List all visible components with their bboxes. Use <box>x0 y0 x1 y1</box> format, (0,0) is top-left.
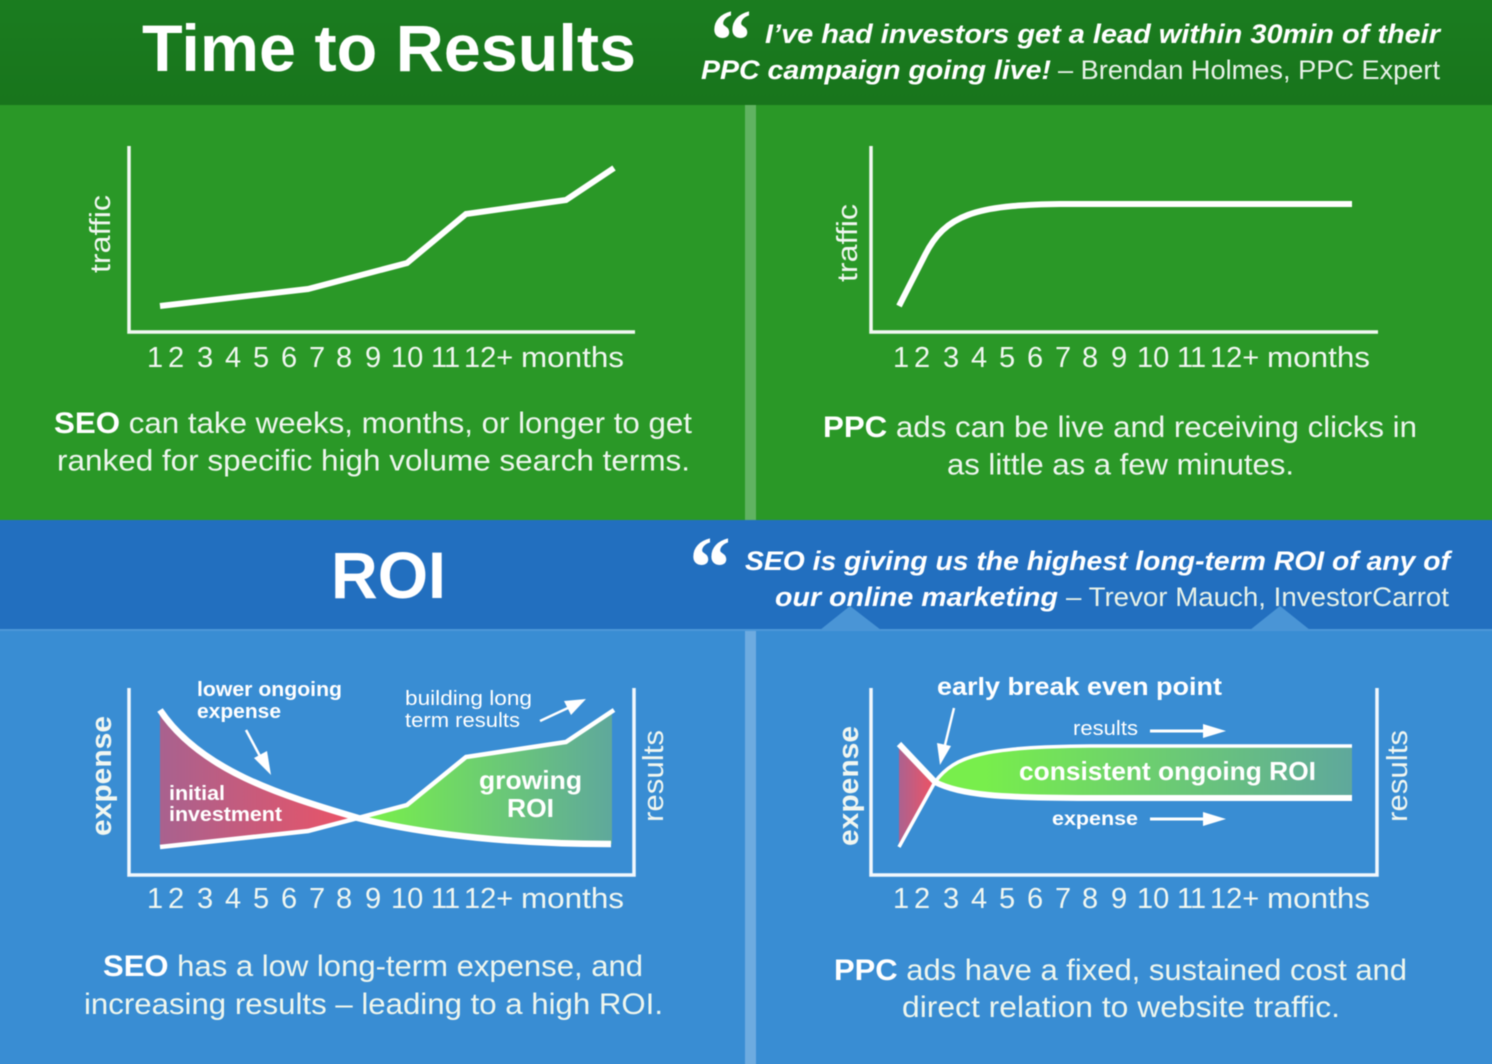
chart: SEO traffic over time: 12+ <box>464 342 513 374</box>
chart: PPC roi: 9 <box>1111 883 1127 915</box>
quote: Trevor Mauch: – Trevor Mauch, InvestorCarrot <box>1066 582 1450 612</box>
panel: roi background <box>0 630 1492 1064</box>
chart: PPC traffic over time: traffic <box>832 204 864 282</box>
chart: PPC roi <box>833 673 1414 915</box>
chart: PPC roi: 3 <box>943 883 959 915</box>
chart: PPC traffic over time: months <box>1267 342 1370 374</box>
line: expense <box>899 744 1352 798</box>
chart: SEO traffic over time: 1 <box>147 342 163 374</box>
label: early break even point: early break even point <box>937 673 1223 701</box>
text: PPC roi: direct relation to website traffic. <box>902 991 1340 1024</box>
chart: SEO roi: expense <box>86 716 118 836</box>
quote: Brendan Holmes: – Brendan Holmes, PPC Expert <box>1058 55 1440 85</box>
chart: SEO roi: 4 <box>225 883 241 915</box>
arrow: to expense line <box>246 730 271 775</box>
chart: SEO traffic over time: months <box>521 342 624 374</box>
chart: SEO roi: 2 <box>168 883 184 915</box>
chart: SEO traffic over time: 3 <box>197 342 213 374</box>
quote: Brendan Holmes: I’ve had investors get a lead within 30min of their <box>765 19 1442 49</box>
chart: SEO traffic over time: 5 <box>253 342 269 374</box>
chart: SEO traffic over time: 7 <box>309 342 325 374</box>
label: lower ongoing expense: lower ongoing <box>197 679 342 701</box>
line: results <box>160 710 614 847</box>
chart: SEO traffic over time: 8 <box>336 342 352 374</box>
quote: Trevor Mauch: “ <box>685 520 729 617</box>
chart: PPC traffic over time: 1 <box>893 342 909 374</box>
chart: PPC traffic over time: 2 <box>914 342 930 374</box>
text: SEO time to results: SEO can take weeks, months, or longer to get <box>54 407 693 440</box>
line: expense <box>160 710 611 844</box>
label: growing roi <box>479 765 582 823</box>
chart: PPC traffic over time: 7 <box>1055 342 1071 374</box>
chart: PPC traffic over time: 3 <box>943 342 959 374</box>
chart: PPC traffic over time <box>832 146 1378 374</box>
chart: SEO traffic over time: 6 <box>281 342 297 374</box>
chart: PPC roi: 4 <box>971 883 987 915</box>
arrow: upward results <box>540 699 586 721</box>
text: SEO roi: increasing results – leading to a high ROI. <box>84 988 663 1021</box>
quote: Brendan Holmes: PPC campaign going live! <box>701 55 1051 85</box>
label: building long term results: building long <box>405 688 532 710</box>
chart: PPC roi: 1 <box>893 883 909 915</box>
chart: PPC roi: 6 <box>1027 883 1043 915</box>
chart: SEO roi: 5 <box>253 883 269 915</box>
chart: SEO roi: 9 <box>365 883 381 915</box>
chart: PPC roi: 11 <box>1177 883 1206 915</box>
header: roi <box>0 520 1492 631</box>
text: SEO time to results: ranked for specific high volume search terms. <box>57 444 690 478</box>
chart: PPC roi: 8 <box>1082 883 1098 915</box>
chart: PPC traffic over time: 12+ <box>1210 342 1259 374</box>
chart: SEO roi: results <box>638 730 670 822</box>
header: time to results <box>0 0 1492 105</box>
label: growing roi: growing <box>479 765 582 795</box>
text: PPC time to results <box>823 411 1417 482</box>
area: consistent ongoing roi <box>935 746 1352 798</box>
chart: PPC roi: expense <box>833 726 865 846</box>
arrow: to break even <box>937 708 954 765</box>
chart: PPC roi: 7 <box>1055 883 1071 915</box>
chart: SEO traffic over time: 2 <box>168 342 184 374</box>
chart: PPC traffic over time: 8 <box>1082 342 1098 374</box>
chart: SEO roi: 8 <box>336 883 352 915</box>
chart: SEO roi: 12+ <box>464 883 513 915</box>
area: initial investment <box>160 710 358 847</box>
chart: SEO roi: 6 <box>281 883 297 915</box>
chart: PPC roi: 2 <box>914 883 930 915</box>
text: SEO time to results <box>54 407 693 478</box>
chart: PPC roi: results <box>1382 730 1414 822</box>
chart: PPC traffic over time: 11 <box>1177 342 1206 374</box>
label: results arrow <box>1073 718 1226 740</box>
chart: SEO traffic over time: 9 <box>365 342 381 374</box>
text: SEO roi: SEO has a low long-term expense, and <box>103 950 643 983</box>
quote: Trevor Mauch: SEO is giving us the highest long-term ROI of any of <box>745 546 1453 576</box>
area: initial cost <box>899 744 933 847</box>
label: lower ongoing expense: expense <box>197 701 281 723</box>
label: building long term results <box>405 688 532 732</box>
label: expense arrow: expense <box>1052 809 1138 830</box>
line: results <box>899 746 1352 847</box>
label: growing roi: ROI <box>507 793 554 823</box>
chart: SEO traffic over time: 11 <box>431 342 460 374</box>
text: SEO roi <box>84 950 663 1021</box>
chart: SEO roi: 1 <box>147 883 163 915</box>
chart: SEO roi: 10 <box>391 883 423 915</box>
title: roi: ROI <box>331 538 446 612</box>
label: building long term results: term results <box>405 710 520 732</box>
chart: SEO traffic over time: 10 <box>391 342 423 374</box>
chart: SEO traffic over time: 4 <box>225 342 241 374</box>
quote: Brendan Holmes <box>701 0 1442 90</box>
chart: PPC traffic over time: 6 <box>1027 342 1043 374</box>
chart: PPC roi: 12+ <box>1210 883 1259 915</box>
chart: SEO traffic over time <box>85 146 635 374</box>
panel: time to results background <box>0 105 1492 520</box>
area: growing roi <box>358 712 612 844</box>
chart: SEO roi: months <box>521 883 624 915</box>
chart: PPC traffic over time: 9 <box>1111 342 1127 374</box>
chart: PPC traffic over time: 5 <box>999 342 1015 374</box>
chart: SEO traffic over time: traffic <box>85 195 117 273</box>
label: initial investment: initial <box>169 783 225 805</box>
label: initial investment: investment <box>169 804 282 826</box>
label: results arrow: results <box>1073 718 1138 740</box>
text: PPC roi <box>834 954 1407 1024</box>
chart: SEO roi: 7 <box>309 883 325 915</box>
label: lower ongoing expense <box>197 679 342 723</box>
label: expense arrow <box>1052 809 1226 830</box>
text: PPC time to results: PPC ads can be live and receiving clicks in <box>823 411 1417 444</box>
quote: Trevor Mauch <box>685 520 1453 617</box>
chart: PPC traffic over time: 10 <box>1137 342 1169 374</box>
chart: SEO roi <box>86 679 670 915</box>
label: consistent ongoing roi: consistent ongoing ROI <box>1019 756 1316 786</box>
title: time to results: Time to Results <box>142 11 636 85</box>
text: PPC roi: PPC ads have a fixed, sustained cost and <box>834 954 1407 987</box>
text: PPC time to results: as little as a few minutes. <box>947 448 1294 482</box>
chart: SEO roi: 11 <box>431 883 460 915</box>
label: initial investment <box>169 783 282 826</box>
chart: PPC roi: 5 <box>999 883 1015 915</box>
chart: SEO roi: 3 <box>197 883 213 915</box>
quote: Trevor Mauch: our online marketing <box>775 582 1059 612</box>
chart: PPC roi: 10 <box>1137 883 1169 915</box>
chart: PPC traffic over time: 4 <box>971 342 987 374</box>
chart: PPC roi: months <box>1267 883 1370 915</box>
